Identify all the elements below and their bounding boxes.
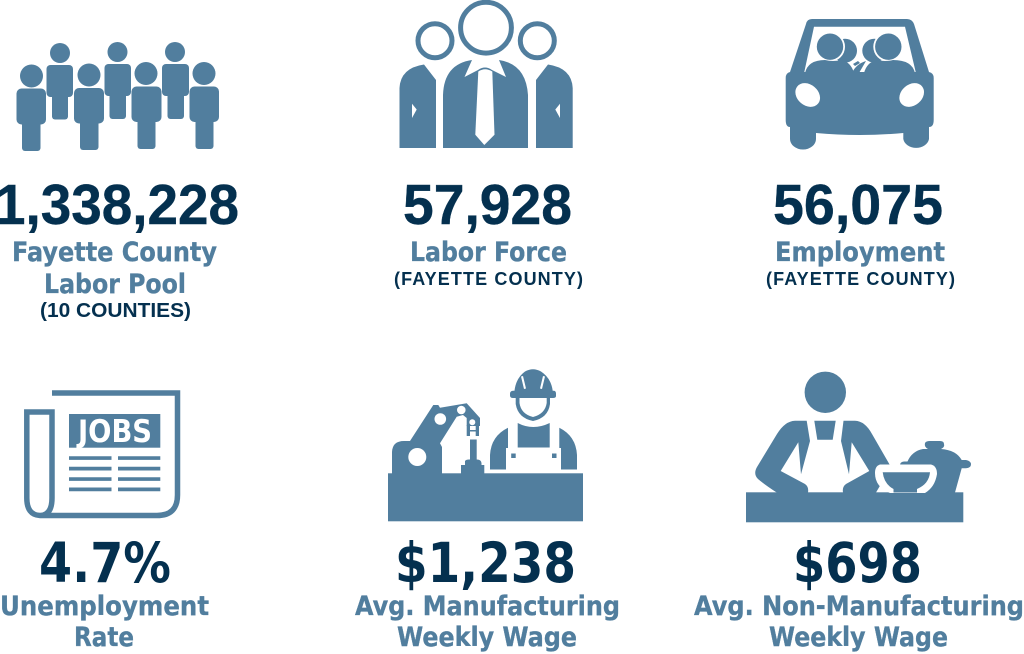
panel: manufacturing wage (355, 369, 620, 653)
icon: cook at counter (746, 372, 971, 522)
statistic: 4.7%: 4.7% (39, 531, 171, 595)
icon: crowd of people (16, 42, 219, 151)
note: Fayette County: (FAYETTE COUNTY) (394, 269, 583, 289)
panel: unemployment rate (0, 393, 209, 653)
icon: factory worker and robot arm (388, 369, 583, 521)
label: Labor Force: Labor Force (410, 237, 567, 268)
label: Employment: Employment (775, 237, 945, 268)
icon: car with passengers (786, 19, 934, 150)
label: Labor Pool: Labor Pool (44, 269, 186, 300)
label: Avg. Manufacturing: Avg. Manufacturing (355, 591, 620, 622)
label: Weekly Wage: Weekly Wage (397, 622, 577, 653)
statistic: $698: $698 (793, 531, 922, 595)
statistic: $1,238: $1,238 (395, 531, 576, 595)
panel: labor pool (0, 42, 239, 322)
label: Unemployment: Unemployment (0, 591, 209, 622)
note: 10 counties: (10 COUNTIES) (40, 300, 191, 322)
statistic: 57,928: 57,928 (403, 173, 572, 237)
panel: labor force (394, 2, 583, 289)
note: Fayette County: (FAYETTE COUNTY) (766, 269, 955, 289)
icon: jobs newspaper (27, 393, 177, 516)
icon: jobs newspaper: JOBS (76, 414, 152, 450)
statistic: 1,338,228: 1,338,228 (0, 173, 239, 237)
statistic: 56,075: 56,075 (773, 173, 943, 237)
panel: employment (766, 19, 955, 289)
panel: non-manufacturing wage (694, 372, 1024, 653)
icon: three business people (400, 2, 573, 148)
label: Weekly Wage: Weekly Wage (769, 622, 948, 653)
label: Rate: Rate (74, 622, 134, 653)
label: Fayette County: Fayette County (12, 237, 217, 268)
